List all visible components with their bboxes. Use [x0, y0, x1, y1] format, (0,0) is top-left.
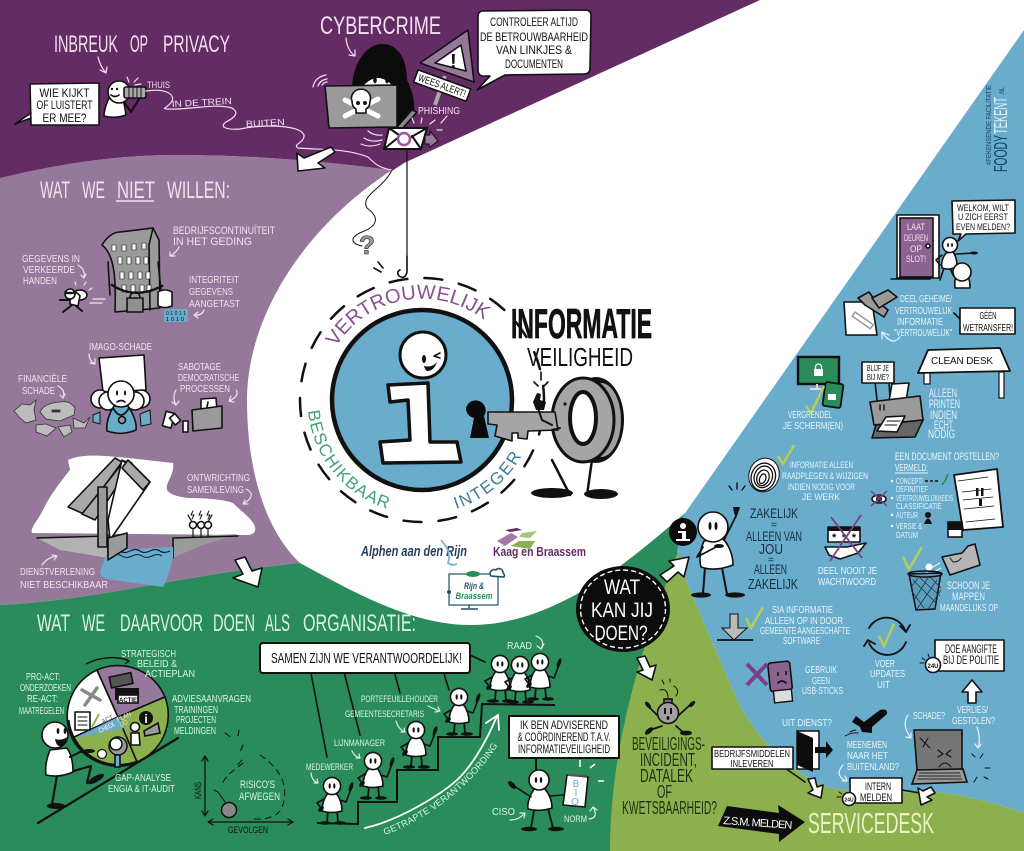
icon: person with info badge: [669, 483, 745, 598]
text: pro-act re-act: [19, 672, 71, 717]
chart: plan do check act wheel: CHECK: [98, 721, 116, 735]
text: deel geheime: VERTROUWELIJK: [895, 306, 952, 317]
text: alleen printen: INDIEN: [930, 410, 957, 422]
box: bedrijfsmiddelen inleveren: [712, 747, 805, 782]
icon: sad usb stick: GEEN: [812, 676, 830, 687]
credit: artist signature: FOODY: [991, 135, 1011, 172]
text: strategisch beleid: STRATEGISCH: [121, 648, 176, 660]
panel: light green incident and servicedesk: [610, 552, 1024, 851]
text: deel geheime: [894, 294, 952, 339]
text: dienstverlening niet beschikbaar: DIENSTVERLENING: [20, 566, 95, 578]
text: financiele schade: [18, 373, 67, 398]
text: ontwrichting samenleving: ONTWRICHTING: [187, 472, 250, 484]
chart: plan do check act wheel: ACTIE: [119, 697, 138, 704]
icon: do not share password: ***: [832, 532, 857, 544]
icon: locked screens: [783, 357, 844, 432]
speech bubble: samen zijn we verantwoordelijk: [260, 643, 485, 757]
speech bubble: controleer altijd: DE BETROUWBAARHEID: [480, 30, 588, 44]
speech bubble: wie kijkt: WIE KIJKT: [40, 86, 90, 100]
line: hook and question mark: [353, 151, 407, 277]
icon: broken laptop: [905, 710, 990, 784]
logo: alphen aan den rijn: Alphen aan den Rijn: [360, 543, 467, 560]
line: eavesdropping trail with labels: IN DE TREIN: [172, 96, 232, 109]
icon: person with telescope: [104, 77, 146, 117]
text: adviesaanvragen: [172, 693, 251, 737]
text: integriteit gegevens aangetast: INTEGRITEIT: [189, 274, 239, 286]
speech bubble: controleer altijd: CONTROLEER ALTIJD: [490, 15, 578, 29]
text: beveiligingsincident: [622, 734, 717, 818]
person: medewerker: MEDEWERKER: [306, 762, 353, 773]
text: deel geheime: "VERTROUWELIJK": [894, 328, 952, 339]
text: alleen printen: ALLEEN: [929, 388, 957, 400]
text: pro-act re-act: PRO-ACT:: [26, 672, 60, 683]
text: gegevens in verkeerde handen: VERKEERDE: [23, 264, 75, 276]
text: bedrijfscontinuiteit: [170, 225, 275, 256]
icon: door laat deuren op slot: DEUREN: [904, 233, 928, 243]
chart: plan do check act wheel: i: [144, 712, 148, 726]
label: integer: INTEGER: [454, 452, 522, 508]
badge: wat kan jij doen: [576, 566, 670, 652]
speech bubble: ik ben adviserend: IK BEN ADVISEREND: [520, 720, 608, 732]
heading: wat we daarvoor doen: ORGANISATIE:: [303, 610, 416, 637]
icon: fingerprint: [744, 445, 794, 496]
text: informatie alleen raadplegen: RAADPLEGEN & WIJZIGEN: [782, 471, 868, 482]
person: ciso with norm: O: [571, 797, 579, 808]
chart: risk axes and bomb: RISICO'S: [240, 779, 275, 791]
icon: locked screens: JE SCHERM(EN): [783, 421, 843, 432]
text: dienstverlening niet beschikbaar: NIET BESCHIKBAAR: [20, 579, 108, 591]
box: intern melden: MELDEN: [860, 792, 892, 804]
heading: wat we niet willen: NIET: [117, 177, 155, 204]
text: gegevens in verkeerde handen: [22, 253, 86, 287]
text: sia informatie: SOFTWARE: [783, 636, 820, 647]
text: beveiligingsincident: DATALEK: [640, 766, 693, 786]
person: ciso with norm: B: [573, 779, 580, 790]
speech bubble: wie kijkt: OF LUISTERT: [36, 98, 93, 112]
heading: wat we daarvoor doen: DAARVOOR: [120, 610, 203, 637]
text: alleen printen: [928, 388, 960, 441]
logo: alphen aan den rijn: [360, 540, 467, 565]
icon: download arrow with check: [717, 607, 763, 640]
speech bubble: ik ben adviserend: [509, 716, 619, 770]
icon: do not share password: WACHTWOORD: [818, 576, 876, 588]
person: gemeentesecretaris: [345, 709, 438, 769]
text: een document opstellen: CLASSIFICATIE: [896, 501, 942, 511]
text: gap-analyse: [108, 772, 175, 795]
ring: dashed circle: [284, 262, 560, 538]
text: zakelijk alleen van jou: ZAKELIJK: [748, 576, 798, 593]
staircase line: [317, 704, 555, 824]
arrow: z.s.m. melden: [718, 805, 805, 842]
chart: risk axes and bomb: AFWEGEN: [239, 791, 280, 803]
text: verlies gestolen: VERLIES/: [957, 704, 988, 716]
icon: worried council with blank sheet: [89, 341, 152, 433]
text: sia informatie: GEMEENTE AANGESCHAFTE: [760, 626, 850, 637]
box: intern melden: 24U: [844, 798, 854, 804]
text: adviesaanvragen: TRAININGEN: [174, 704, 218, 716]
person: gemeentesecretaris: GEMEENTESECRETARIS: [345, 709, 424, 720]
text: deel geheime: INFORMATIE: [897, 317, 943, 328]
text: sia informatie: ALLEEN OP IN DOOR: [765, 616, 843, 627]
text: sia informatie: SIA INFORMATIE: [772, 605, 833, 616]
text: zakelijk alleen van jou: [746, 505, 802, 593]
text: adviesaanvragen: PROJECTEN: [176, 714, 216, 726]
icon: update cycle: [864, 618, 910, 691]
text: adviesaanvragen: ADVIESAANVRAGEN: [172, 693, 251, 705]
icon: corrupted data: 0 1 0 1 1: [166, 311, 186, 317]
icon: stamped document: [844, 290, 900, 341]
box: intern melden: [837, 778, 920, 806]
icon: do not share password: DEEL NOOIT JE: [818, 565, 877, 577]
text: informatie alleen raadplegen: INFORMATIE ALLEEN: [790, 460, 853, 471]
text: deel geheime: DEEL GEHEIME/: [900, 294, 952, 305]
icon: trash and folder: [903, 544, 980, 610]
icon: door laat deuren op slot: LAAT: [907, 222, 925, 232]
line: eavesdropping trail with labels: [146, 80, 392, 170]
text: sia informatie: [760, 605, 850, 647]
logo: rijn en braassem monitor: Braassem: [456, 591, 493, 602]
text: alleen printen: ECHT: [934, 420, 953, 432]
arrow: getrapte verantwoording: GETRAPTE VERANTWOORDING: [384, 743, 497, 834]
icon: airplane: MEENEMEN: [847, 739, 887, 751]
speech bubble: welkom: [952, 200, 1015, 241]
icon: phishing email: PHISHING: [418, 106, 460, 117]
text: een document opstellen: VERSIE &: [896, 521, 922, 531]
text: pro-act re-act: RE-ACT:: [27, 694, 58, 705]
icon: raised bridge scene: [32, 456, 255, 587]
panel: dark purple threats band: [0, 0, 760, 179]
text: gegevens in verkeerde handen: GEGEVENS IN: [22, 253, 80, 265]
panel: light purple what we do not want: [0, 155, 392, 605]
text: alleen printen: PRINTEN: [929, 399, 960, 411]
icon: exit door: [782, 717, 833, 772]
text: schoon je mappen: [940, 580, 998, 614]
icon: corrupted data: [164, 309, 188, 323]
speech bubble: ik ben adviserend: INFORMATIEVEILIGHEID: [518, 744, 610, 756]
heading: wat we niet willen: WE: [82, 177, 105, 204]
person: ciso with norm: [492, 760, 604, 831]
label: beschikbaar: BESCHIKBAAR: [308, 410, 389, 509]
title: veiligheid: VEILIGHEID: [527, 342, 633, 372]
text: een document opstellen: DATUM: [896, 530, 918, 540]
arrow: threats to what we do not want: [297, 147, 335, 171]
icon: crossed eye: [871, 491, 887, 506]
icon: door laat deuren op slot: OP: [910, 244, 922, 254]
box: intern melden: INTERN: [865, 781, 891, 793]
icon: running thief: [60, 282, 105, 312]
text: een document opstellen: VERMELD:: [895, 463, 928, 474]
speech bubble: controleer altijd: VAN LINKJES &: [496, 43, 572, 57]
speech bubble: ik ben adviserend: & COÖRDINEREND T.A.V.: [518, 732, 610, 744]
credit: artist signature: #FEKENSENDE FACILITATIE: [986, 85, 993, 165]
icon: update cycle: UPDATES: [870, 668, 905, 680]
icon: airplane: BUITENLAND?: [847, 761, 899, 773]
logo: kaag en braassem: Kaag en Braassem: [493, 545, 586, 559]
person: ciso with norm: NORM: [564, 814, 587, 825]
heading: wat we niet willen: WAT: [40, 177, 70, 204]
speech bubble: welkom: EVEN MELDEN?: [956, 222, 1010, 232]
icon: exit door: UIT DIENST?: [782, 717, 832, 729]
person: ciso with norm: CISO: [492, 807, 515, 818]
heading: inbreuk op privacy: OP: [130, 31, 148, 58]
credit: artist signature: .NL: [999, 87, 1006, 95]
arrow: laptop to servicedesk: [918, 787, 935, 805]
text: beveiligingsincident: INCIDENT,: [640, 750, 697, 770]
text: ontwrichting samenleving: [187, 472, 251, 504]
text: zakelijk alleen van jou: JOU: [759, 541, 783, 558]
icon: airplane: [839, 710, 899, 781]
text: integriteit gegevens aangetast: AANGETAST: [189, 298, 240, 310]
chart: risk axes and bomb: KANS: [193, 782, 203, 799]
speech bubble: welkom: WELKOM, WILT: [957, 203, 1009, 213]
text: een document opstellen: DEFINITIEF: [896, 484, 928, 494]
line: eavesdropping trail with labels: BUITEN: [246, 117, 285, 129]
text: pro-act re-act: ONDERZOEKEN: [20, 683, 71, 694]
box: bedrijfsmiddelen inleveren: BEDRIJFSMIDDELEN: [714, 749, 790, 760]
text: schoon je mappen: MAPPEN: [952, 591, 985, 603]
box: geen wetransfer: [954, 308, 1015, 334]
icon: door laat deuren op slot: SLOT!: [906, 254, 926, 264]
icon: locked screens: VERGRENDEL: [788, 410, 832, 421]
icon: person pushing wheel up slope: [38, 722, 178, 823]
text: gap-analyse: ENGIA & IT-AUDIT: [108, 783, 175, 795]
text: informatie alleen raadplegen: INDIEN NODIG VOOR: [788, 482, 855, 493]
person: medewerker: [306, 762, 354, 825]
icon: worried council with blank sheet: IMAGO-SCHADE: [89, 341, 152, 353]
speech bubble: welkom: U ZICH EERST: [958, 212, 1008, 222]
icon: printer with sign: [862, 362, 923, 438]
persons: raad: RAAD: [507, 641, 532, 652]
persons: raad: [485, 636, 562, 704]
person: lijnmanager: LIJNMANAGER: [334, 738, 385, 749]
speech bubble: wie kijkt: ER MEE?: [42, 111, 87, 125]
text: beveiligingsincident: BEVEILIGINGS-: [632, 734, 705, 754]
box: bedrijfsmiddelen inleveren: INLEVEREN: [730, 759, 774, 770]
text: dienstverlening niet beschikbaar: [20, 555, 108, 591]
heading: inbreuk op privacy: INBREUK: [54, 31, 118, 58]
icon: airplane: NAAR HET: [847, 750, 888, 762]
text: financiele schade: SCHADE: [22, 385, 55, 397]
arrow: to person in blue: [660, 557, 689, 582]
heading: wat we daarvoor doen: ALS: [265, 610, 290, 637]
line: hook and question mark: ?: [359, 230, 375, 260]
icon: update cycle: UIT: [877, 679, 890, 691]
badge: wat kan jij doen: WAT: [604, 576, 640, 599]
credit: artist signature: TEKENT: [991, 97, 1011, 134]
panel: blue what you can do: [677, 30, 1024, 813]
arrow: cybercrime to hacker: [346, 38, 355, 56]
icon: sad usb stick: [747, 661, 843, 703]
chart: risk axes and bomb: GEVOLGEN: [228, 825, 268, 835]
text: informatie alleen raadplegen: [782, 460, 868, 503]
icon: warning sign wees alert: !: [450, 51, 457, 73]
box: geen wetransfer: GÉÉN: [980, 309, 996, 322]
text: zakelijk alleen van jou: =: [771, 520, 777, 531]
text: een document opstellen: [891, 451, 999, 540]
heading: inbreuk op privacy: [54, 31, 230, 58]
speech bubble: samen zijn we verantwoordelijk: SAMEN ZIJN WE VERANTWOORDELIJK!: [271, 650, 462, 667]
icon: do not share password: [818, 515, 877, 588]
arrow: to servicedesk from door: [808, 778, 823, 798]
icon: update cycle: VOER: [875, 658, 895, 670]
text: adviesaanvragen: MELDINGEN: [174, 725, 216, 737]
credit: artist signature: [986, 85, 1011, 172]
badge: wat kan jij doen: KAN JIJ: [591, 599, 653, 622]
text: gap-analyse: GAP-ANALYSE: [115, 772, 171, 784]
icon: clean desk: CLEAN DESK: [931, 356, 993, 367]
text: een document opstellen: CONCEPT/: [896, 476, 923, 486]
box: doe aangifte: 24U: [927, 664, 939, 670]
heading: wat we daarvoor doen: WE: [82, 610, 105, 637]
icon: broken piggy bank: [14, 400, 90, 437]
arrow: what we do not want to organisation: [233, 557, 262, 587]
icon: key character in keyhole: [466, 372, 624, 499]
icon: phishing email: [361, 106, 460, 149]
icon: printer with sign: BLIJF JE: [867, 363, 889, 373]
panel: dark green organisation: [0, 513, 685, 851]
icon: document with calendar: [948, 469, 1003, 537]
text: strategisch beleid: ACTIEPLAN: [145, 668, 195, 680]
icon: protesters: [188, 511, 212, 537]
logo: kaag en braassem: [493, 528, 586, 559]
heading: wat we niet willen: [40, 177, 230, 204]
text: schoon je mappen: SCHOON JE: [947, 580, 990, 592]
speech bubble: controleer altijd: [477, 10, 591, 90]
speech bubble: controleer altijd: DOCUMENTEN: [505, 57, 563, 71]
chart: plan do check act wheel: ACT: [101, 714, 115, 726]
icon: broken laptop: SCHADE?: [913, 710, 945, 722]
text: alleen printen: NODIG: [928, 429, 955, 441]
text: verlies gestolen: GESTOLEN?: [952, 715, 995, 727]
chart: plan do check act wheel: DO: [119, 719, 129, 729]
icon: warning sign wees alert: WEES ALERT!: [416, 73, 467, 100]
guide paths for ring labels: [308, 299, 536, 835]
text: zakelijk alleen van jou: ALLEEN VAN: [746, 528, 802, 544]
text: financiele schade: FINANCIËLE: [18, 373, 67, 385]
heading: servicedesk: SERVICEDESK: [808, 808, 934, 840]
text: sabotage democratische processen: [172, 361, 239, 405]
text: beveiligingsincident: OF: [657, 782, 672, 802]
icon: warning sign wees alert: [414, 30, 474, 105]
icon: printer with sign: BIJ ME?: [867, 372, 889, 382]
icon: sad usb stick: USB-STICKS: [802, 686, 843, 697]
heading: wat we daarvoor doen: WAT: [37, 610, 70, 637]
text: sabotage democratische processen: DEMOCRATISCHE: [178, 372, 239, 384]
text: informatie alleen raadplegen: JE WERK: [802, 492, 841, 503]
text: ontwrichting samenleving: SAMENLEVING: [187, 484, 244, 496]
heading: cybercrime: CYBERCRIME: [320, 12, 441, 40]
text: integriteit gegevens aangetast: GEGEVENS: [189, 286, 233, 298]
text: gegevens in verkeerde handen: HANDEN: [23, 275, 57, 287]
speech bubble: wie kijkt: [15, 83, 99, 125]
logo: rijn en braassem monitor: [447, 569, 504, 609]
person: ciso with norm: I: [575, 788, 577, 799]
icon: corrupted data: 1 0 1 0: [166, 317, 184, 323]
icon: hacker with laptop: [313, 44, 417, 129]
person: portefeuillehouder: PORTEFEUILLEHOUDER: [361, 694, 438, 705]
text: sabotage democratische processen: SABOTAGE: [178, 361, 221, 373]
text: integriteit gegevens aangetast: [189, 274, 240, 318]
person: lijnmanager: [334, 738, 395, 800]
logo: rijn en braassem monitor: Rijn &: [464, 581, 484, 592]
text: pro-act re-act: MAATREGELEN: [19, 706, 64, 717]
text: sabotage democratische processen: PROCESSEN: [180, 383, 230, 395]
text: beveiligingsincident: KWETSBAARHEID?: [622, 798, 717, 818]
icon: guard and visitor: [936, 238, 978, 288]
box: doe aangifte: [920, 640, 1004, 672]
text: bedrijfscontinuiteit: IN HET GEDING: [173, 236, 252, 248]
icon: clean desk: [918, 348, 1010, 398]
arrow: z.s.m. melden: Z.S.M. MELDEN: [723, 815, 793, 832]
icon: ballot box and phone: [162, 398, 222, 432]
icon: bomb character: [644, 679, 696, 736]
text: verlies gestolen: [952, 704, 995, 748]
chart: plan do check act wheel: [67, 658, 168, 767]
heading: inbreuk op privacy: PRIVACY: [163, 31, 230, 58]
chart: plan do check act wheel: PLAN: [116, 711, 132, 724]
text: zakelijk alleen van jou: ZAKELIJK: [750, 505, 798, 521]
arrow: verlies gestolen up: [962, 680, 982, 703]
person: portefeuillehouder: [361, 688, 481, 736]
label: vertrouwelijk: VERTROUWELIJK: [324, 284, 491, 342]
heading: wat we niet willen: WILLEN:: [167, 177, 230, 204]
icon: door laat deuren op slot: [891, 215, 939, 279]
text: een document opstellen: AUTEUR: [896, 510, 918, 520]
chart: risk axes and bomb: [193, 730, 293, 835]
arrow: getrapte verantwoording: [364, 713, 500, 834]
text: een document opstellen: VERTROUWELIJKHEIDS: [896, 493, 953, 503]
icon: sad usb stick: GEBRUIK: [805, 665, 837, 676]
icon: chained building: [102, 228, 172, 312]
heading: wat we daarvoor doen: [37, 610, 416, 637]
text: zakelijk alleen van jou: ALLEEN: [754, 561, 787, 577]
line: eavesdropping trail with labels: THUIS: [147, 80, 170, 90]
text: zakelijk alleen van jou: =: [768, 555, 774, 566]
badge: wat kan jij doen: DOEN?: [594, 622, 648, 645]
heading: wat we daarvoor doen: DOEN: [213, 610, 255, 637]
title: informatie: INFORMATIE: [511, 300, 652, 347]
box: doe aangifte: BIJ DE POLITIE: [943, 655, 999, 667]
text: strategisch beleid: [121, 648, 195, 680]
arrow: to security incident: [637, 656, 656, 680]
central badge: blue i circle: [332, 310, 512, 490]
text: bedrijfscontinuiteit: BEDRIJFSCONTINUÏTEIT: [173, 225, 275, 237]
text: strategisch beleid: BELEID &: [137, 658, 177, 670]
arrow: privacy heading to person: [98, 57, 107, 73]
